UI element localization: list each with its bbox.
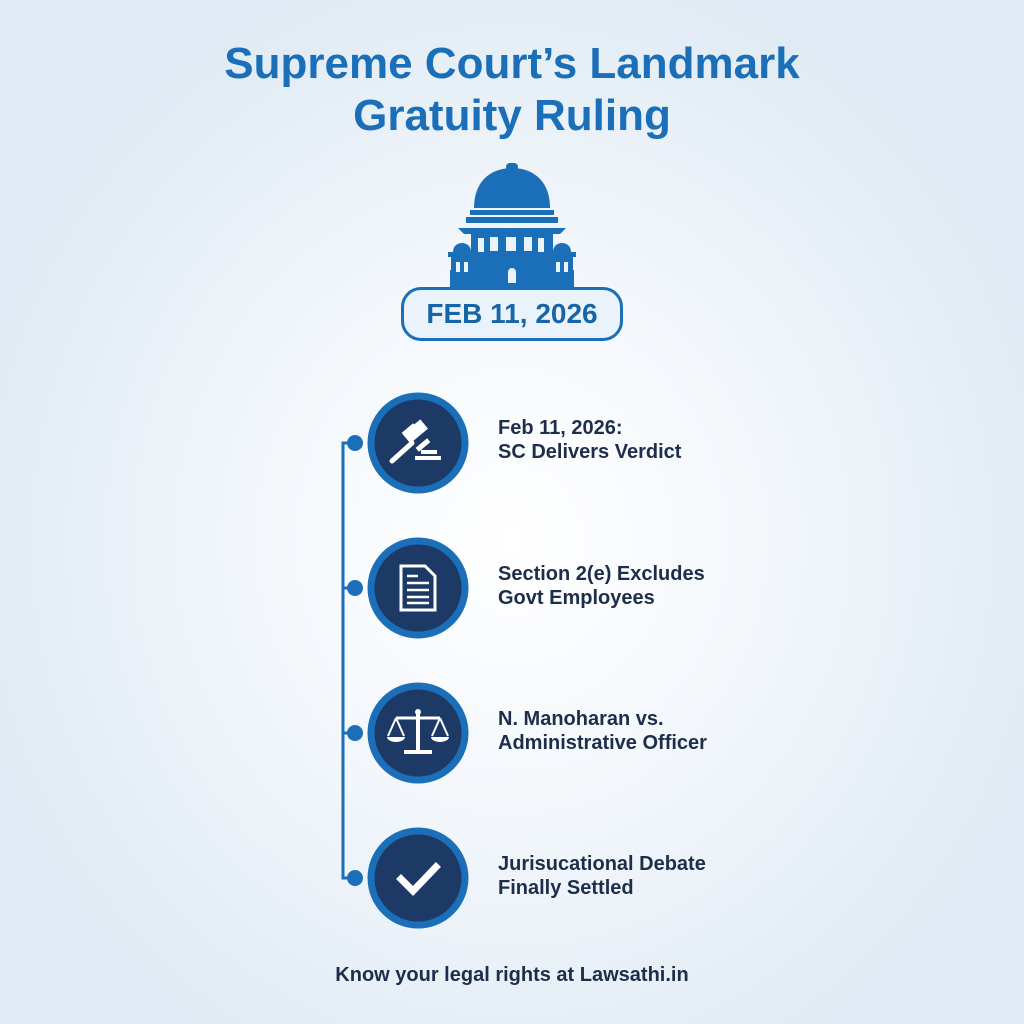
- text: step 1: SC Delivers Verdict: [498, 441, 681, 463]
- step 3 scales: [347, 686, 465, 780]
- text: step 1: Feb 11, 2026:: [498, 417, 623, 439]
- text: step 4: Finally Settled: [498, 877, 634, 899]
- footer: Know your legal rights at Lawsathi.in: [335, 964, 689, 986]
- title: [224, 39, 800, 140]
- step 4 check: [347, 831, 465, 925]
- text: step 2: Govt Employees: [498, 587, 655, 609]
- text: step 4: Jurisucational Debate: [498, 853, 706, 875]
- text: step 1: [498, 417, 682, 463]
- title: Gratuity Ruling: [353, 91, 671, 140]
- text: step 4: [498, 853, 706, 899]
- text: step 2: Section 2(e) Excludes: [498, 563, 705, 585]
- date pill: [401, 287, 623, 341]
- text: step 2: [498, 563, 705, 609]
- step 2 document: [347, 541, 465, 635]
- step 1 gavel: [347, 396, 465, 490]
- text: step 3: [498, 708, 707, 754]
- text: step 3: Administrative Officer: [498, 732, 707, 754]
- icon: court building: [448, 163, 576, 287]
- date pill: FEB 11, 2026: [426, 298, 598, 329]
- text: step 3: N. Manoharan vs.: [498, 708, 664, 730]
- title: Supreme Court’s Landmark: [224, 39, 800, 88]
- timeline line: [343, 443, 355, 878]
